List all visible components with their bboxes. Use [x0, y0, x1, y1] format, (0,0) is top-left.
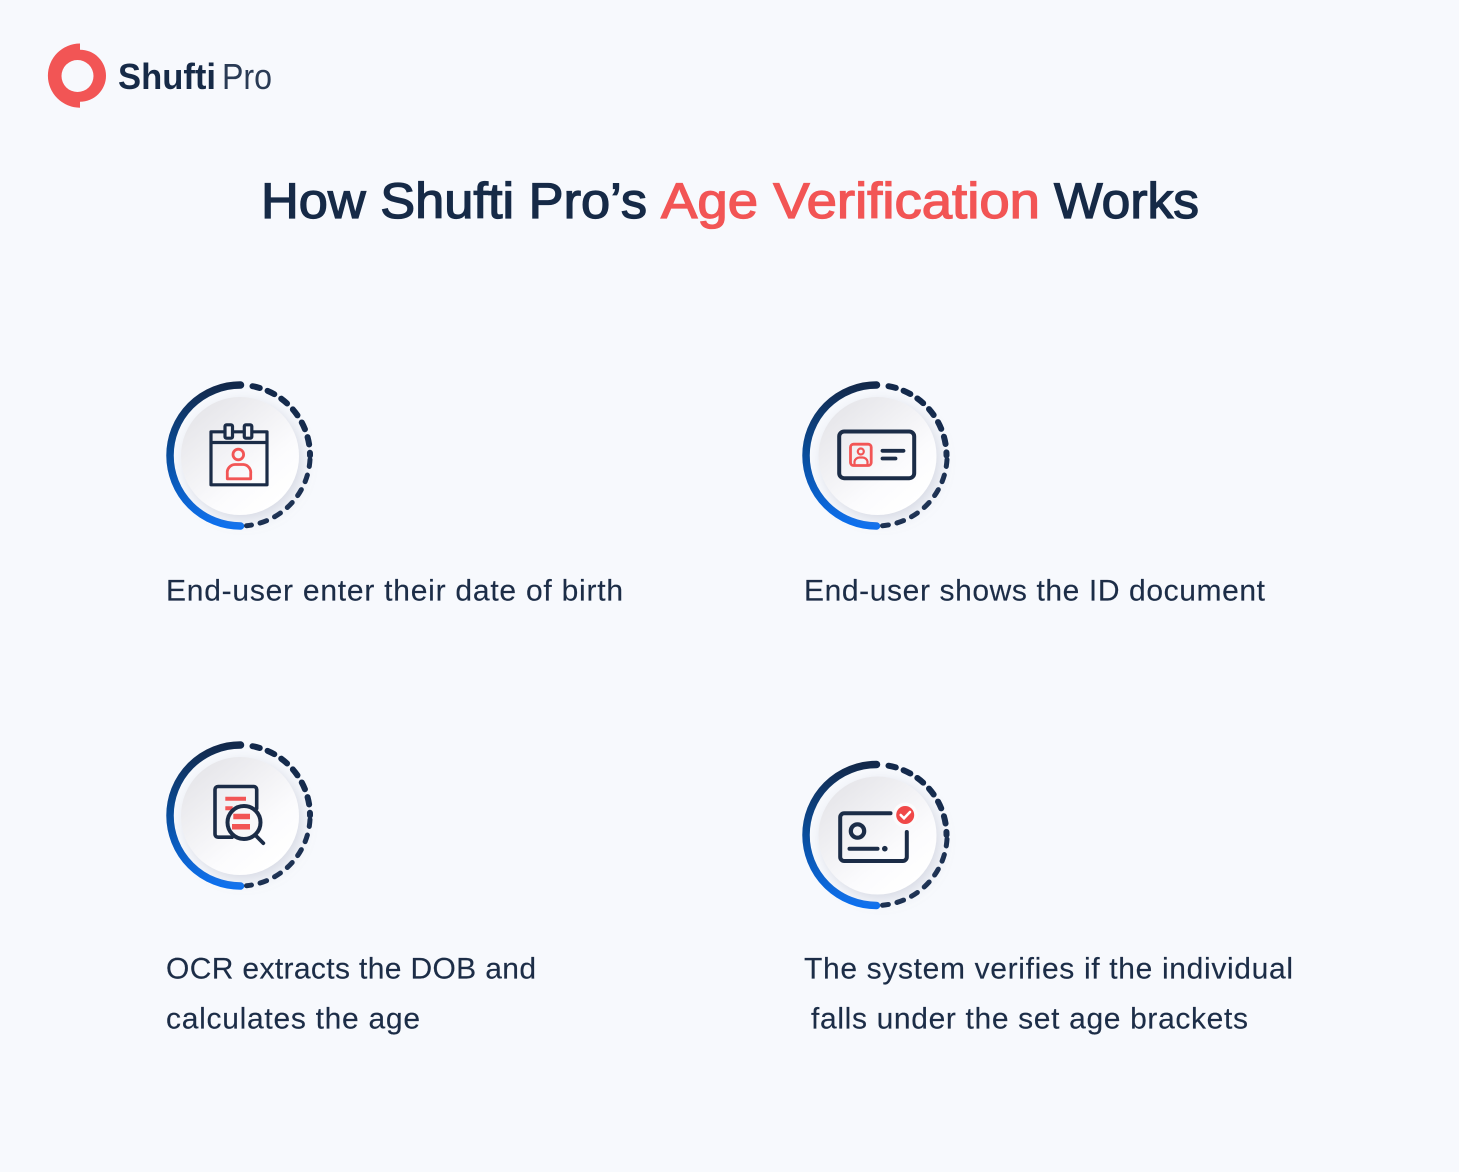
- step 4 text: [804, 952, 1293, 1036]
- step 2 text: End-user shows the ID document: [804, 574, 1266, 608]
- step 4 text: falls under the set age brackets: [811, 1002, 1248, 1036]
- disc: [818, 776, 936, 894]
- title: Age Verification: [661, 173, 1040, 229]
- step 4: verified icon: [806, 764, 947, 906]
- step 3: OCR icon: [170, 745, 310, 886]
- document and magnifier: [215, 786, 263, 843]
- step 1 text: End-user enter their date of birth: [166, 574, 623, 608]
- card with check badge: [840, 802, 918, 861]
- ID card: [839, 432, 914, 478]
- logo: Shufti Pro: [48, 44, 272, 108]
- title: How Shufti Pro’s: [261, 173, 647, 229]
- disc: [818, 397, 936, 515]
- progress ring: [170, 745, 310, 886]
- step 3 text: OCR extracts the DOB and: [166, 952, 536, 986]
- step 1: date of birth icon: [170, 385, 310, 526]
- calendar: [211, 425, 267, 485]
- logo mark: [48, 44, 106, 108]
- logo wordmark: Shufti: [118, 56, 216, 97]
- step 2: ID document icon: [806, 385, 947, 526]
- title: Works: [1054, 173, 1199, 229]
- step 4 text: The system verifies if the individual: [804, 952, 1293, 986]
- disc: [181, 757, 299, 875]
- progress ring: [806, 385, 947, 526]
- step 3 text: calculates the age: [166, 1002, 420, 1036]
- progress ring: [806, 764, 947, 906]
- disc: [181, 397, 299, 515]
- logo wordmark: Pro: [222, 56, 272, 97]
- title: [261, 173, 1199, 229]
- progress ring: [170, 385, 310, 526]
- step 3 text: [166, 952, 536, 1036]
